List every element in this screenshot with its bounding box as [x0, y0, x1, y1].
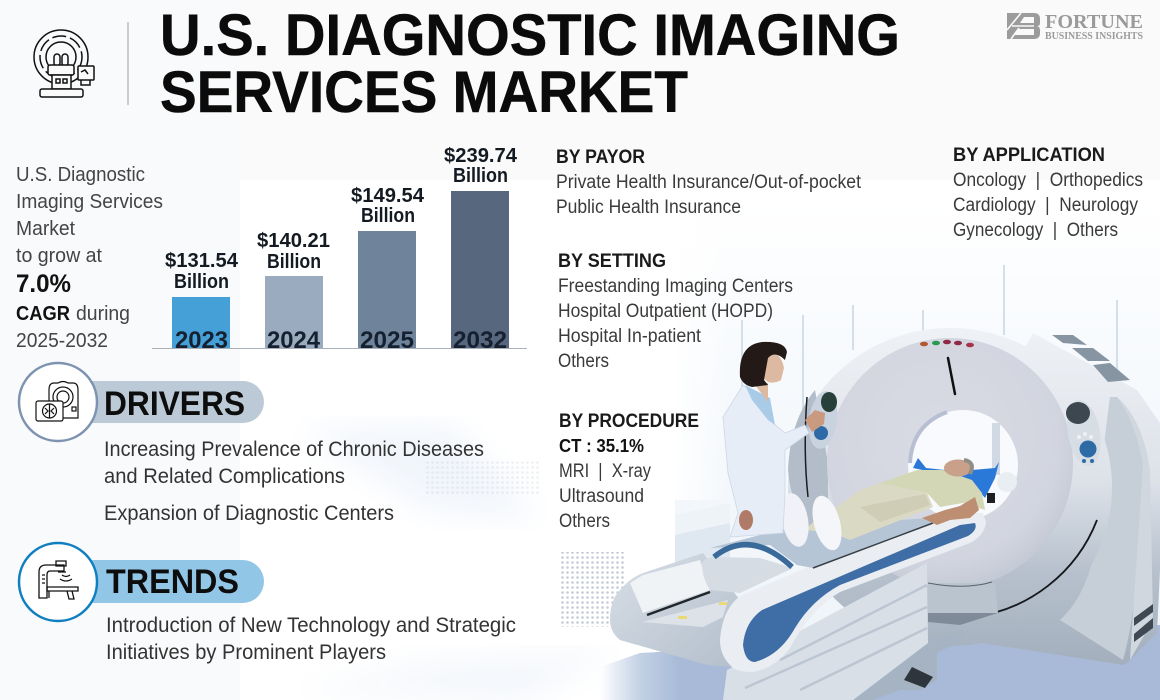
segment: by application: Oncology | Orthopedics	[953, 170, 1143, 191]
logo: Fortune Business Insights	[1007, 11, 1143, 42]
segment: by setting: Hospital Outpatient (HOPD)	[558, 301, 773, 322]
CAGR text block: Imaging Services	[16, 191, 163, 213]
drivers heading	[19, 363, 264, 441]
CAGR text block: 2025-2032	[16, 330, 108, 352]
table rail	[720, 513, 986, 672]
segment: by payor: Private Health Insurance/Out-of-pocket	[556, 172, 862, 193]
drivers heading: DRIVERS	[104, 385, 245, 423]
CAGR text block: CAGR	[16, 303, 71, 325]
segment: by procedure: Ultrasound	[559, 486, 644, 507]
segment: by procedure: BY PROCEDURE	[559, 411, 699, 432]
segment: by application	[953, 145, 1143, 241]
patient	[778, 458, 999, 553]
trends text: Introduction of New Technology and Strategic	[106, 614, 516, 637]
header icon: MRI scanner	[34, 30, 94, 97]
drivers text: Increasing Prevalence of Chronic Diseases	[104, 438, 484, 461]
CAGR text block: 7.0%	[16, 270, 71, 298]
bar 2025: $149.54	[351, 185, 425, 207]
segment: by application: Cardiology | Neurology	[953, 195, 1138, 216]
drivers text: and Related Complications	[104, 465, 345, 488]
segment: by application: BY APPLICATION	[953, 145, 1105, 166]
doctor	[723, 342, 825, 537]
bar 2024: $140.21	[257, 230, 330, 252]
logo: Fortune Business Insights: FORTUNE	[1045, 11, 1143, 33]
bar 2025: 2025	[360, 327, 414, 354]
icon: radiology machine	[39, 561, 78, 599]
segment: by setting	[558, 251, 793, 372]
vents	[1052, 335, 1130, 382]
bar 2024	[257, 230, 330, 354]
bar 2024: Billion	[267, 251, 321, 273]
bar 2023: Billion	[174, 271, 229, 293]
photo: CT scanner room	[561, 200, 1160, 700]
bar 2023	[165, 250, 239, 354]
bar 2023: $131.54	[165, 250, 239, 272]
title	[160, 3, 900, 125]
segment: by payor: Public Health Insurance	[556, 197, 741, 218]
title: SERVICES MARKET	[160, 60, 688, 125]
bar 2024: 2024	[267, 327, 321, 354]
bar 2032	[444, 145, 518, 354]
logo: Fortune Business Insights: BUSINESS INSIGHTS	[1045, 31, 1143, 42]
segment: by procedure: MRI | X-ray	[559, 461, 651, 482]
table left bed	[610, 553, 793, 667]
segment: by application: Gynecology | Others	[953, 220, 1118, 241]
segment: by payor: BY PAYOR	[556, 147, 645, 168]
CAGR text block	[16, 164, 163, 352]
segment: by procedure	[559, 411, 699, 532]
icon: scanner with brain	[36, 382, 78, 421]
trends text: Initiatives by Prominent Players	[106, 641, 386, 664]
trends heading	[19, 543, 264, 621]
title: U.S. DIAGNOSTIC IMAGING	[160, 3, 900, 68]
bar 2032: $239.74	[444, 145, 518, 167]
bar 2025	[351, 185, 425, 354]
CAGR text block: U.S. Diagnostic	[16, 164, 145, 186]
drivers text: Expansion of Diagnostic Centers	[104, 502, 394, 525]
trends heading: TRENDS	[106, 563, 239, 601]
bar 2023: 2023	[175, 327, 228, 354]
control panel right	[1063, 398, 1105, 468]
bar 2025: Billion	[361, 205, 415, 227]
status lights	[920, 340, 974, 347]
segment: by setting: Hospital In-patient	[558, 326, 702, 347]
control panel left	[805, 389, 841, 451]
trends text	[106, 614, 516, 664]
segment: by setting: BY SETTING	[558, 251, 666, 272]
segment: by procedure: Others	[559, 511, 610, 532]
drivers text	[104, 438, 484, 525]
bar 2032: 2032	[453, 327, 507, 354]
segment: by setting: Others	[558, 351, 609, 372]
scanner gantry	[788, 328, 1160, 700]
segment: by procedure: CT : 35.1%	[559, 436, 644, 456]
CAGR text block: during	[76, 303, 130, 325]
CAGR text block: Market	[16, 218, 75, 240]
table pad	[710, 518, 936, 568]
segment: by setting: Freestanding Imaging Centers	[558, 276, 793, 297]
patient table	[610, 513, 986, 700]
CAGR text block: to grow at	[16, 245, 102, 267]
bar chart	[152, 145, 527, 354]
bar 2032: Billion	[453, 165, 508, 187]
segment: by payor	[556, 147, 862, 218]
